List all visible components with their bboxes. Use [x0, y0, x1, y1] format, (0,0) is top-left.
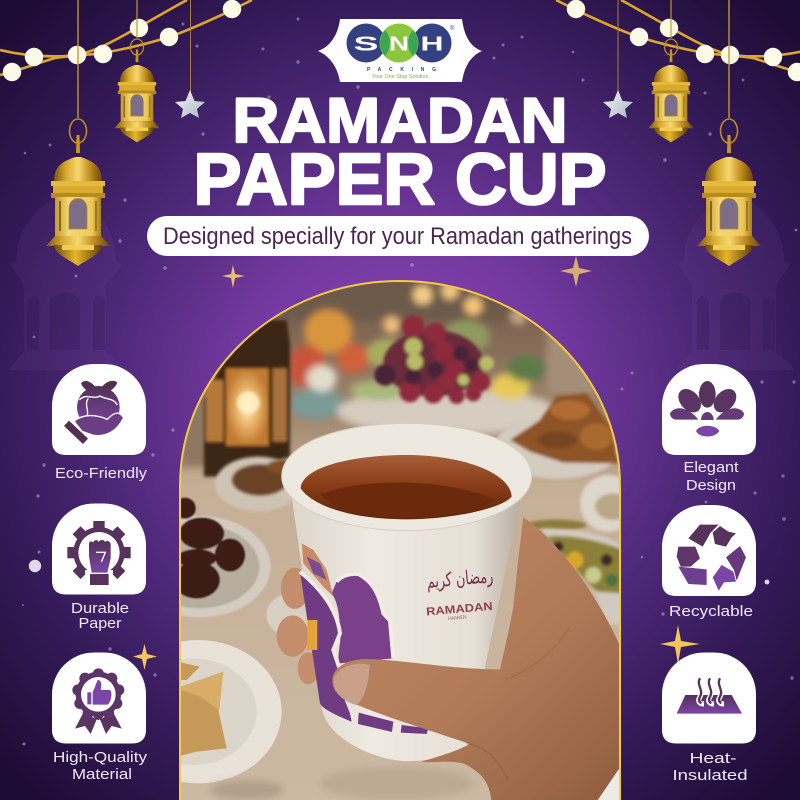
cup branding	[426, 570, 493, 620]
mosque silhouette right	[676, 190, 795, 370]
subtitle pill: Designed specially for your Ramadan gatherings	[163, 223, 632, 250]
label: durable paper: Paper	[78, 616, 122, 632]
logo: S	[354, 34, 378, 56]
blurred back table items	[180, 280, 627, 467]
label: high-quality material: Material	[72, 767, 132, 783]
samosa plate	[181, 640, 282, 784]
sparkle top left	[222, 265, 245, 288]
right salad plate	[540, 528, 623, 625]
logo: PACKING	[367, 67, 436, 73]
arch photo	[181, 282, 619, 800]
arch gold border	[180, 281, 620, 800]
label: high-quality material: High-Quality	[53, 750, 148, 766]
big glowing dots	[29, 560, 769, 584]
mosque silhouette left	[8, 190, 125, 370]
feature: eco-friendly	[52, 364, 146, 455]
logo: H	[420, 34, 444, 56]
light string left	[0, 0, 252, 81]
cup lip	[282, 423, 532, 531]
label: elegant design: Design	[686, 478, 736, 494]
silver star left	[175, 0, 205, 118]
icon: lotus shell	[670, 381, 744, 436]
feature: high-quality material	[52, 652, 146, 744]
icon: gear and fist	[67, 521, 131, 590]
logo: N	[389, 34, 409, 56]
label: eco-friendly: Eco-Friendly	[55, 466, 148, 482]
table shadow	[210, 767, 473, 800]
paper cup	[282, 423, 532, 761]
label: elegant design: Elegant	[684, 460, 738, 476]
cup branding: رمضان كريم	[426, 564, 494, 593]
large lantern right	[697, 0, 761, 266]
icon: rosette and thumb	[72, 668, 124, 734]
label: durable paper: Durable	[71, 601, 129, 617]
blurred right plate with pastries	[496, 392, 619, 533]
icon: globe in hand	[64, 381, 124, 444]
label: durable paper	[71, 601, 129, 632]
hand back fingers	[277, 568, 319, 684]
title: RAMADAN	[232, 86, 568, 156]
icon: heat waves over pad	[677, 678, 742, 714]
sparkle right lower	[660, 625, 700, 664]
title: PAPER CUP	[194, 139, 606, 220]
title	[194, 86, 606, 220]
feature: durable paper	[52, 504, 146, 594]
label: elegant design	[684, 460, 738, 494]
sparkle top right	[560, 256, 592, 287]
feature: heat-insulated	[662, 652, 756, 744]
saucer	[266, 595, 308, 633]
icon: recycle arrows	[677, 525, 746, 591]
logo: Your One Stop Solution.	[372, 74, 430, 80]
subtitle pill	[147, 216, 649, 256]
label: heat-insulated	[672, 751, 748, 784]
dates plate	[181, 496, 271, 618]
hand with thumb	[332, 517, 627, 800]
feature: elegant design	[662, 364, 756, 455]
blurred grapes and fruit	[374, 315, 494, 404]
small lantern left	[114, 0, 160, 142]
cup purple band pattern	[300, 543, 428, 734]
thumbnail	[334, 664, 370, 705]
cup body	[292, 497, 520, 761]
light string right	[556, 0, 800, 81]
large lantern left	[46, 0, 110, 266]
shirt cuff	[598, 769, 619, 800]
small food plate behind cup	[215, 457, 302, 511]
logo: ®	[450, 25, 455, 32]
tea	[301, 455, 512, 519]
photo table background	[177, 277, 623, 800]
logo	[318, 19, 482, 82]
small lantern right	[648, 0, 694, 142]
sparkle left lower	[133, 644, 157, 670]
blurred lantern in photo	[204, 320, 290, 477]
cup branding: RAMADAN	[426, 601, 493, 619]
label: heat-insulated: Insulated	[672, 768, 748, 784]
label: high-quality material	[53, 750, 148, 783]
silver star right	[603, 0, 633, 118]
feature: recyclable	[662, 505, 756, 596]
cup branding: HAAREN	[448, 614, 467, 622]
label: heat-insulated: Heat-	[690, 751, 737, 767]
label: recyclable: Recyclable	[669, 604, 753, 620]
